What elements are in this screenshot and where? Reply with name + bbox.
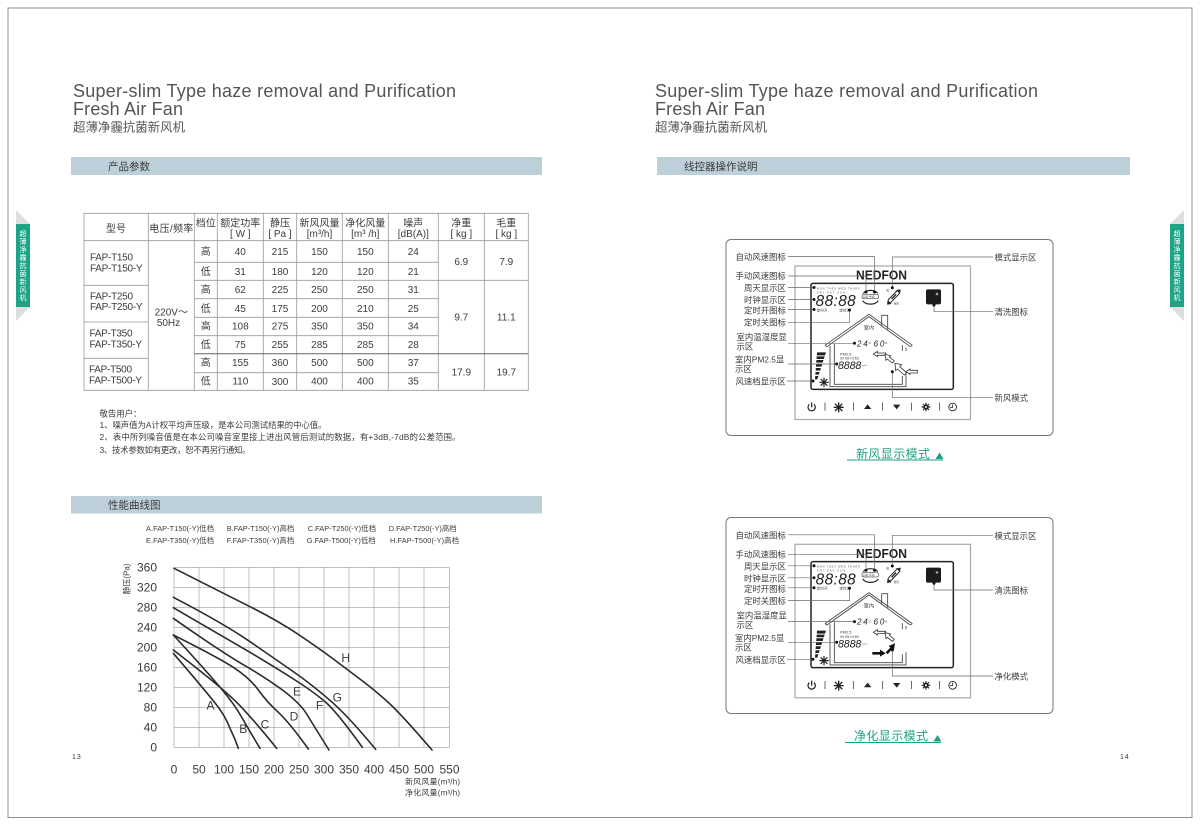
performance curve chart: 0 (150, 740, 157, 754)
LCD display: % (885, 341, 888, 345)
LCD display: 定时关 (839, 586, 851, 591)
performance curve chart (122, 560, 460, 798)
LCD display: °C (868, 341, 872, 345)
parameter table: 噪声 (403, 216, 423, 230)
LCD display (808, 283, 956, 412)
caption: fresh air display mode: 新风显示模式 (856, 446, 930, 461)
parameter table: 400 (311, 376, 328, 388)
performance curve chart: G (333, 690, 342, 704)
callouts and leader lines: 室内温湿度显 (736, 610, 787, 620)
parameter table: 40 (235, 247, 246, 258)
title: left page: Fresh Air Fan (73, 99, 183, 119)
parameter table: 275 (272, 322, 289, 332)
chart legend: F.FAP-T350(-Y)高档 (227, 536, 294, 545)
parameter table: 155 (232, 358, 249, 369)
parameter table: 低 (201, 374, 211, 388)
parameter table: 220V～ (155, 308, 188, 318)
LCD display: 定时开 (817, 586, 828, 591)
parameter table: 7.9 (499, 257, 514, 268)
parameter table: FAP-T250-Y (90, 302, 143, 313)
performance curve chart: H (341, 651, 350, 665)
callouts and leader lines: 周天显示区 (744, 283, 786, 293)
LCD display: PM2.5 (840, 630, 852, 635)
chart legend: H.FAP-T500(-Y)高档 (390, 536, 459, 545)
LCD display: 优秀 轻微 中度 重度 (840, 356, 860, 360)
parameter table: 低 (201, 265, 211, 278)
parameter table: [m³/h] (307, 229, 332, 240)
parameter table: 新风风量 (300, 216, 340, 230)
callouts and leader lines: 风速档显示区 (736, 376, 786, 386)
parameter table: 45 (235, 304, 246, 315)
parameter table: 50Hz (157, 318, 180, 329)
LCD display: 排 (886, 567, 889, 571)
LCD display: 优秀 轻微 中度 重度 (840, 634, 860, 638)
parameter table: 500 (311, 358, 328, 369)
chart legend: B.FAP-T150(-Y)高档 (227, 524, 294, 533)
callouts and leader lines: 定时关图标 (744, 318, 786, 328)
parameter table: 31 (235, 267, 246, 278)
LCD display: 24 (856, 339, 868, 348)
callouts and leader lines: 室内温湿度显 (736, 332, 787, 342)
callouts and leader lines: 自动风速图标 (736, 530, 786, 540)
brand logo: NEDFON (856, 268, 907, 282)
parameter table: [ Pa ] (268, 229, 292, 240)
parameter table: FAP-T350 (90, 329, 133, 340)
section heading: product parameters (71, 157, 542, 175)
control buttons (808, 402, 956, 412)
parameter table: 低 (201, 338, 211, 351)
chart legend: A.FAP-T150(-Y)低档 (146, 524, 214, 533)
parameter table: 31 (408, 285, 419, 296)
callouts and leader lines: 定时开图标 (744, 584, 786, 594)
controller panel: fresh air mode (726, 240, 1053, 436)
LCD display: FRI SAT SUN (817, 570, 845, 573)
performance curve chart: 360 (137, 560, 157, 574)
performance curve chart: 40 (144, 720, 157, 734)
performance curve chart: F (316, 698, 323, 712)
callouts and leader lines: 示区 (736, 620, 753, 630)
parameter table: [ kg ] (495, 229, 517, 240)
parameter table: 215 (272, 247, 289, 258)
performance curve chart: E (293, 684, 301, 698)
parameter table: 24 (408, 247, 419, 258)
LCD display: ug/m3 (862, 365, 867, 367)
section heading: controller instructions: 线控器操作说明 (684, 160, 758, 173)
parameter table: 17.9 (452, 368, 471, 378)
callouts and leader lines (735, 252, 1036, 403)
callouts and leader lines: 定时关图标 (744, 596, 786, 606)
notes text: 2、表中所列噪音值是在本公司噪音室里接上进出风管后测试的数据，有+3dB,-7dB的公差范围。 (100, 432, 460, 442)
performance curve chart: 120 (137, 680, 157, 694)
parameter table: 11.1 (497, 312, 516, 324)
notes text: 1、噪声值为A计权平均声压级，是本公司测试结果的中心值。 (100, 420, 326, 430)
section heading: performance curves (71, 496, 542, 514)
parameter table: 250 (311, 285, 328, 296)
callouts and leader lines (735, 530, 1036, 681)
parameter table: 型号 (106, 222, 126, 235)
parameter table: FAP-T250 (90, 291, 133, 302)
parameter table: 350 (357, 322, 374, 332)
performance curve chart: 240 (137, 620, 157, 634)
parameter table: 额定功率 (220, 216, 260, 230)
callouts and leader lines: 手动风速图标 (736, 549, 786, 559)
title: right page: Fresh Air Fan (655, 99, 765, 119)
parameter table: [dB(A)] (398, 229, 429, 240)
parameter table: 62 (235, 285, 246, 296)
parameter table: 175 (272, 304, 289, 315)
callouts and leader lines: 风速档显示区 (736, 655, 786, 665)
callouts and leader lines: 时钟显示区 (744, 295, 786, 305)
chart legend: C.FAP-T250(-Y)低档 (308, 524, 376, 533)
parameter table: 250 (357, 285, 374, 296)
side tab: right page: 超薄净霾抗菌新风机 (1174, 229, 1180, 302)
parameter table: 108 (232, 322, 249, 332)
parameter table: 500 (357, 358, 374, 369)
performance curve chart: 净化风量(m³/h) (405, 788, 460, 798)
LCD display: 自动 手动 (863, 295, 875, 299)
LCD display: 8888 (838, 360, 861, 372)
callouts and leader lines: 时钟显示区 (744, 573, 786, 583)
performance curve chart: 320 (137, 580, 157, 594)
parameter table: FAP-T500 (89, 365, 132, 376)
parameter table: 净化风量 (345, 216, 385, 230)
notes text (100, 408, 460, 455)
LCD display: 新风 (894, 580, 899, 584)
LCD display: 60 (874, 618, 885, 627)
LCD display: 排 (886, 288, 889, 292)
performance curve chart: 450 (389, 762, 409, 776)
title: left page: 超薄净霾抗菌新风机 (73, 120, 186, 134)
performance curve chart: B (239, 722, 247, 736)
parameter table: 档位 (196, 216, 216, 230)
title: right page: 超薄净霾抗菌新风机 (655, 120, 768, 134)
parameter table: 150 (357, 247, 374, 258)
callouts and leader lines: 定时开图标 (744, 306, 786, 316)
parameter table: 净重 (451, 216, 471, 230)
callouts and leader lines: 清洗图标 (994, 585, 1029, 595)
side tab: left page: 超薄净霾抗菌新风机 (20, 229, 26, 302)
LCD display: MON TUES WED THURS (817, 287, 860, 290)
parameter table: 110 (232, 376, 249, 388)
parameter table: 150 (311, 247, 328, 258)
parameter table: 285 (311, 340, 328, 351)
section heading: performance curves: 性能曲线图 (108, 498, 160, 512)
performance curve chart: 250 (289, 762, 309, 776)
chart legend (146, 524, 459, 545)
callouts and leader lines: 新风模式 (994, 393, 1029, 403)
callouts and leader lines: 室内PM2.5显 (735, 354, 785, 364)
LCD display: 8888 (838, 638, 861, 650)
parameter table: FAP-T150-Y (90, 263, 143, 274)
parameter table: 25 (408, 304, 419, 315)
parameter table: 静压 (270, 216, 290, 230)
performance curve chart: 400 (364, 762, 384, 776)
parameter table: 120 (311, 267, 328, 278)
control buttons (808, 681, 956, 691)
LCD display: 新风 (894, 302, 899, 306)
performance curve chart: 静压(Pa) (122, 563, 132, 595)
title: right page: Super-slim Type haze removal and Purification (655, 81, 1038, 101)
performance curve chart: 50 (192, 762, 206, 776)
notes text: 3、技术参数如有更改，恕不再另行通知。 (100, 445, 250, 455)
parameter table: 225 (272, 285, 289, 296)
LCD display: 自动 手动 (863, 573, 875, 577)
parameter table: 37 (408, 358, 419, 369)
controller panel: purification mode (726, 518, 1053, 714)
LCD display: PM2.5 (840, 351, 852, 356)
parameter table (84, 213, 528, 390)
parameter table: 200 (311, 304, 328, 315)
chart legend: E.FAP-T350(-Y)低档 (146, 536, 214, 545)
callouts and leader lines: 周天显示区 (744, 561, 786, 571)
page number 14: 14 (1120, 754, 1130, 761)
LCD display: FRI SAT SUN (817, 291, 845, 294)
performance curve chart: C (261, 718, 270, 732)
title: left page (73, 81, 456, 134)
performance curve chart: 100 (214, 762, 234, 776)
parameter table: 高 (201, 245, 211, 258)
parameter table: 255 (272, 340, 289, 351)
LCD display: 定时关 (839, 307, 851, 312)
callouts and leader lines: 清洗图标 (994, 307, 1029, 317)
performance curve chart: 500 (414, 762, 434, 776)
parameter table: 180 (272, 267, 289, 278)
LCD display: 室内 (864, 602, 874, 610)
parameter table: 电压/频率 (149, 222, 193, 235)
callouts and leader lines: 示区 (735, 364, 752, 374)
LCD display: MON TUES WED THURS (817, 566, 860, 569)
section heading: product parameters: 产品参数 (108, 160, 150, 173)
performance curve chart: 新风风量(m³/h) (405, 776, 460, 786)
callouts and leader lines: 模式显示区 (994, 252, 1036, 262)
LCD display: % (885, 619, 888, 623)
parameter table: FAP-T500-Y (89, 376, 142, 387)
LCD display (808, 562, 956, 691)
parameter table: 285 (357, 340, 374, 351)
parameter table: 360 (272, 358, 289, 369)
parameter table: 低 (201, 302, 211, 315)
parameter table: 高 (201, 283, 211, 296)
performance curve chart: 80 (144, 700, 157, 714)
callouts and leader lines: 室内PM2.5显 (735, 633, 785, 643)
chart legend: G.FAP-T500(-Y)低档 (307, 536, 376, 545)
section heading: controller instructions (657, 157, 1130, 175)
performance curve chart: 0 (171, 762, 178, 776)
parameter table: 300 (272, 377, 289, 388)
side tab: left page (16, 210, 30, 321)
performance curve chart: A (206, 698, 215, 712)
LCD display: ug/m3 (862, 643, 867, 645)
caption: purification display mode: 净化显示模式 (854, 729, 928, 743)
performance curve chart: 300 (314, 762, 334, 776)
performance curve chart: 550 (439, 762, 460, 776)
parameter table: 28 (408, 340, 419, 351)
parameter table: FAP-T350-Y (90, 339, 142, 350)
callouts and leader lines: 示区 (735, 642, 752, 652)
parameter table: [ W ] (230, 229, 251, 240)
parameter table: 毛重 (496, 216, 516, 230)
LCD display: 室内 (864, 323, 874, 331)
parameter table: 高 (201, 320, 211, 332)
page number 13: 13 (72, 754, 82, 761)
title: right page (655, 81, 1038, 134)
parameter table: 350 (311, 322, 328, 332)
title: left page: Super-slim Type haze removal and Purification (73, 81, 456, 101)
LCD display: 定时开 (817, 307, 828, 312)
parameter table: 210 (357, 304, 374, 315)
LCD display: 88:88 (816, 571, 856, 588)
parameter table: 35 (408, 376, 419, 388)
parameter table: [m³ /h] (351, 229, 380, 240)
parameter table: 75 (235, 340, 246, 351)
parameter table: 高 (201, 356, 211, 369)
parameter table: 9.7 (454, 312, 469, 324)
performance curve chart: 200 (264, 762, 284, 776)
LCD display: 88:88 (816, 293, 856, 310)
parameter table: FAP-T150 (90, 252, 133, 264)
callouts and leader lines: 手动风速图标 (736, 271, 786, 281)
performance curve chart: 150 (239, 762, 259, 776)
parameter table: 34 (408, 322, 419, 332)
parameter table: 6.9 (454, 257, 469, 268)
LCD display: 24 (856, 618, 868, 627)
parameter table: 120 (357, 267, 374, 278)
brand logo: NEDFON (856, 547, 907, 561)
callouts and leader lines: 自动风速图标 (736, 252, 786, 262)
parameter table: [ kg ] (450, 229, 472, 240)
performance curve chart: 350 (339, 762, 359, 776)
performance curve chart: 280 (137, 600, 157, 614)
callouts and leader lines: 模式显示区 (994, 531, 1036, 541)
performance curve chart: 200 (137, 640, 157, 654)
callouts and leader lines: 示区 (736, 342, 753, 352)
parameter table: 21 (408, 267, 419, 278)
chart legend: D.FAP-T250(-Y)高档 (389, 524, 457, 533)
parameter table: 19.7 (497, 368, 516, 378)
performance curve chart: D (290, 710, 299, 724)
LCD display: °C (868, 619, 872, 623)
parameter table: 400 (357, 376, 374, 388)
callouts and leader lines: 净化模式 (994, 671, 1029, 681)
notes text: 敬告用户： (100, 408, 141, 418)
LCD display: 60 (874, 339, 885, 348)
side tab: right page (1170, 210, 1184, 321)
performance curve chart: 160 (137, 660, 157, 674)
